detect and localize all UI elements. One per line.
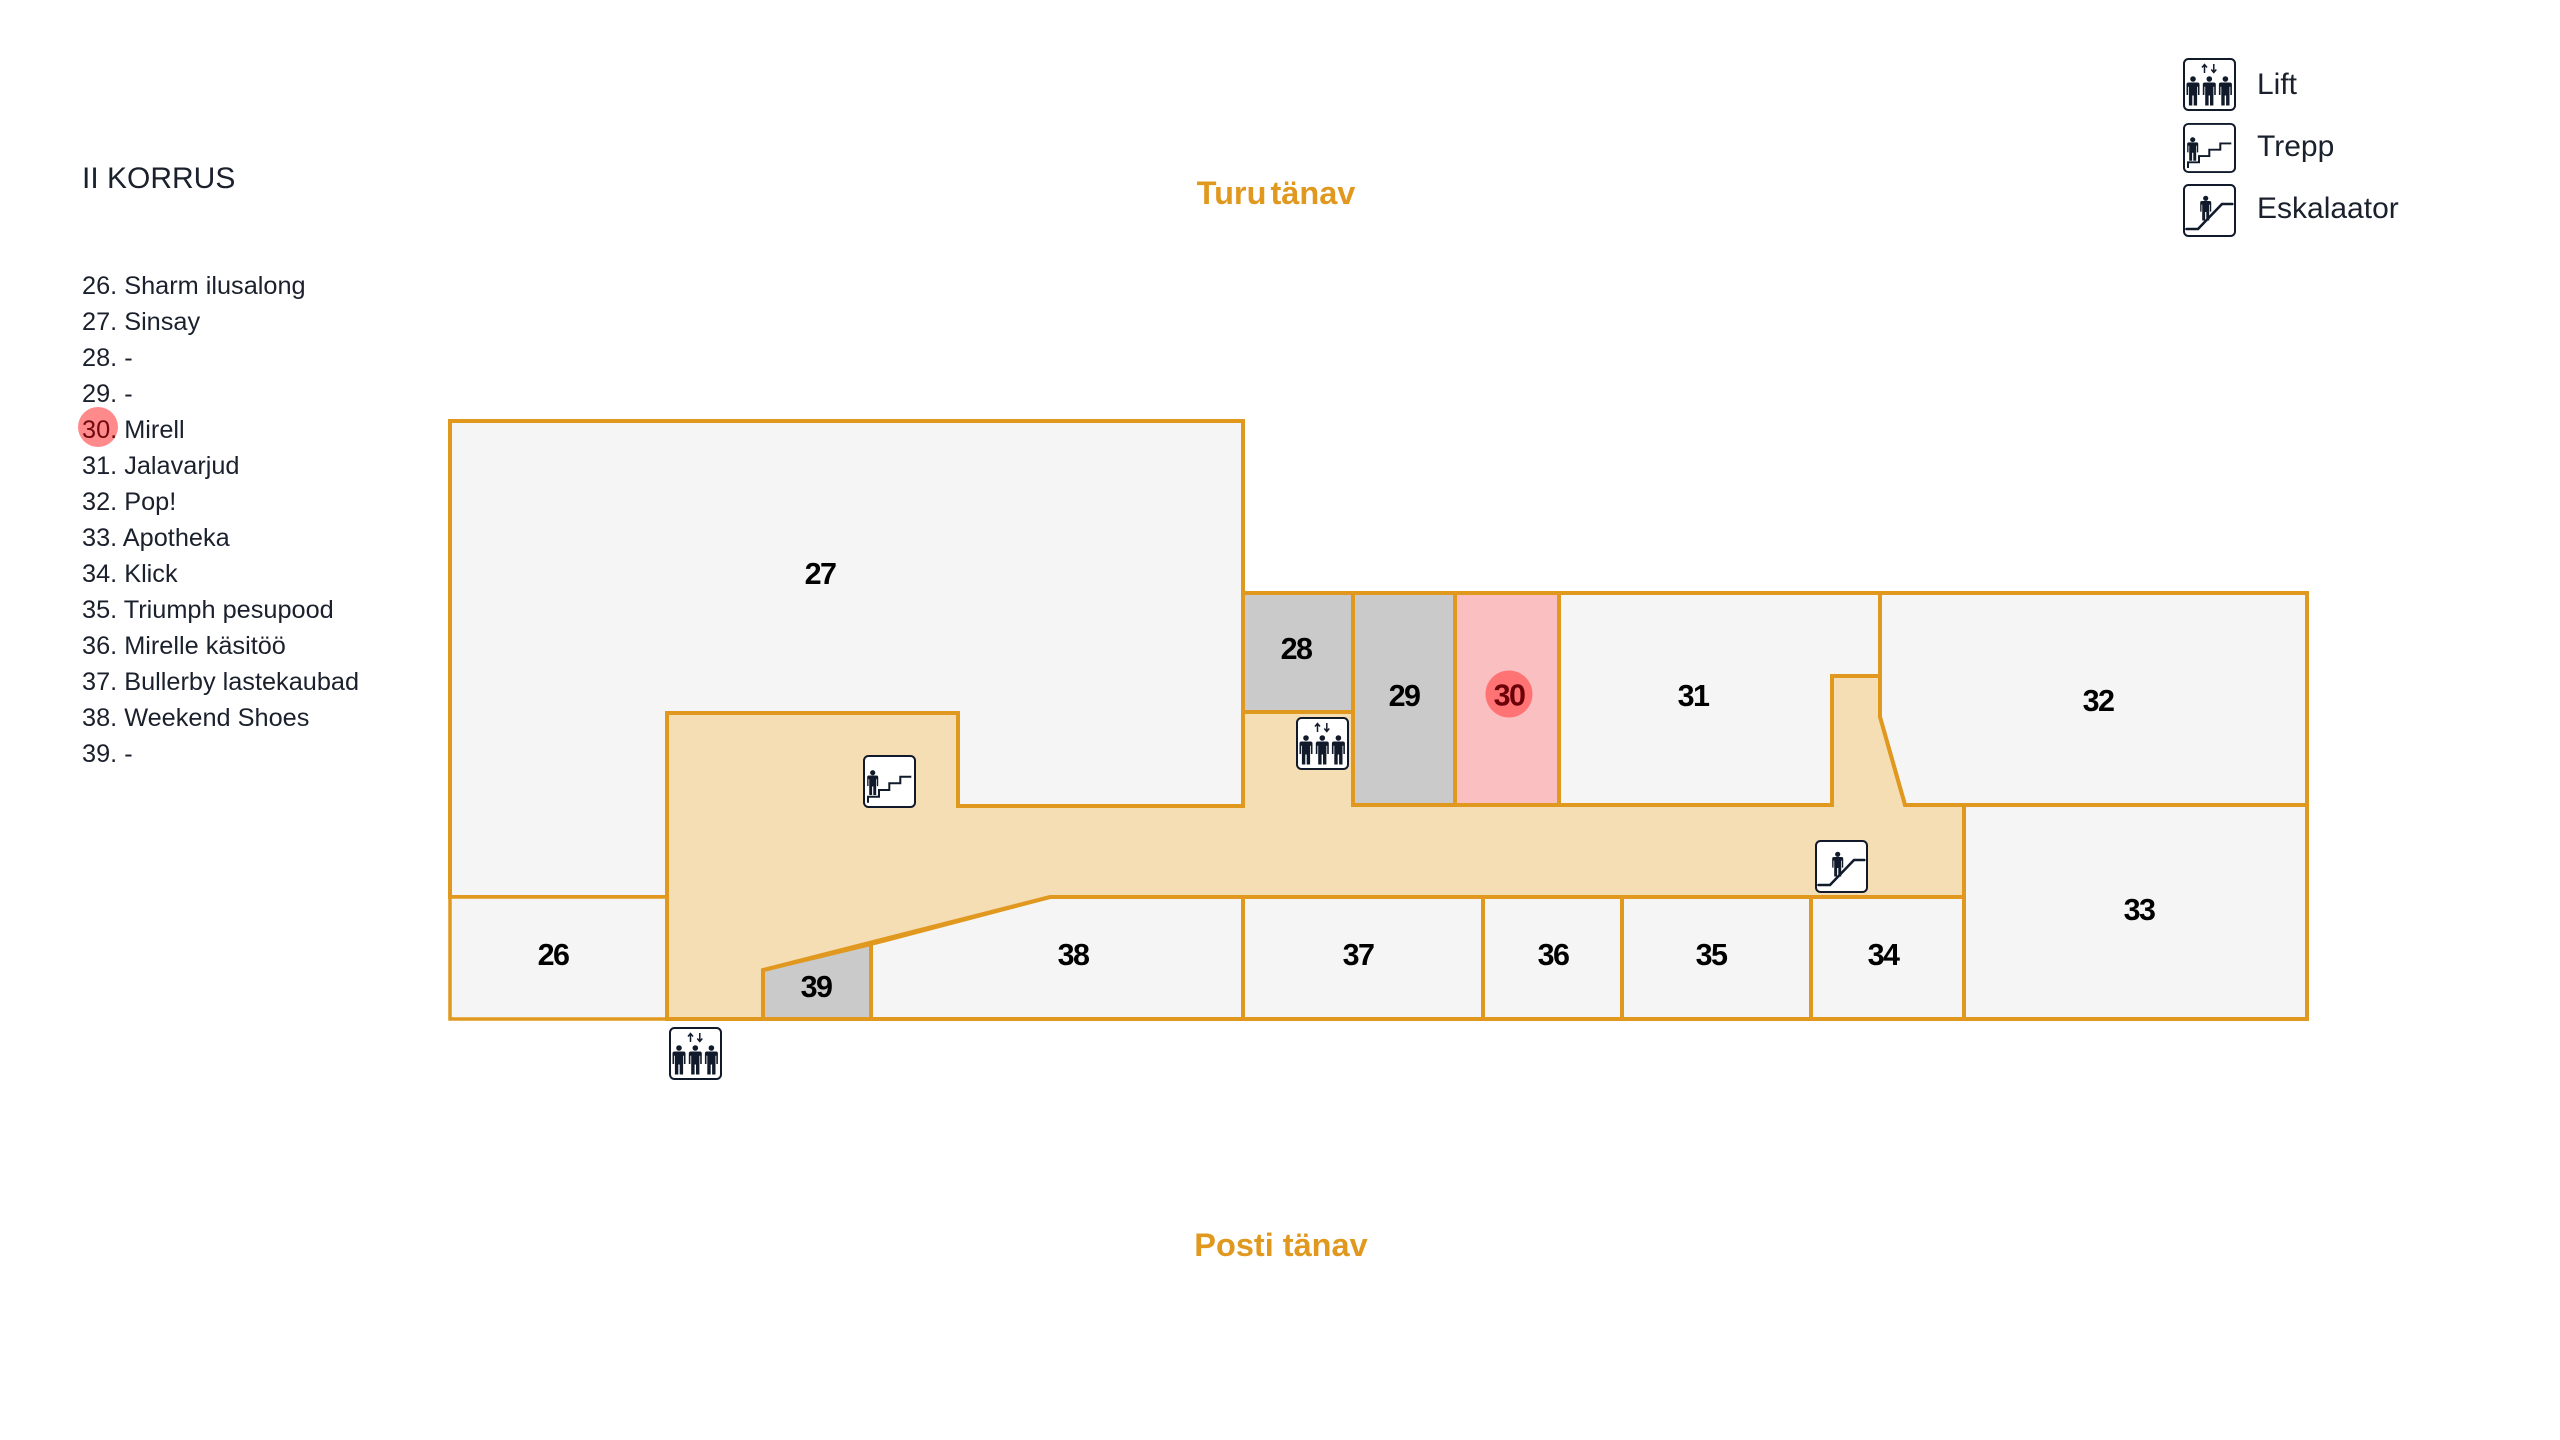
street label: Posti tänav: Posti tänav	[1194, 1227, 1368, 1263]
marker circle for shop 30	[1486, 670, 1532, 718]
shop list: 36. Mirelle käsitöö	[82, 632, 286, 660]
title: floor heading: II KORRUS	[82, 162, 235, 195]
shop list: 28. -	[82, 344, 133, 372]
icon: lift, bottom	[670, 1028, 721, 1079]
unit numbers	[538, 557, 2155, 1004]
unit numbers: 27	[805, 557, 836, 591]
unit numbers: 36	[1538, 938, 1569, 972]
shop list: 33. Apotheka	[82, 524, 231, 552]
unit 33	[1964, 805, 2307, 1019]
shop list: 26. Sharm ilusalong	[82, 272, 306, 300]
legend icon: stairs	[2184, 124, 2235, 172]
unit numbers: 31	[1678, 679, 1710, 713]
legend	[2184, 59, 2399, 236]
shop list: 37. Bullerby lastekaubad	[82, 668, 359, 696]
highlight marker for shop 30	[78, 407, 118, 447]
unit numbers: 26	[538, 938, 569, 972]
shop list: 35. Triumph pesupood	[82, 596, 334, 624]
shop list	[78, 272, 359, 768]
legend icon: lift	[2184, 59, 2235, 110]
unit 35	[1622, 897, 1811, 1019]
unit numbers: 37	[1343, 938, 1374, 972]
unit numbers: 35	[1696, 938, 1728, 972]
unit 37	[1243, 897, 1483, 1019]
unit numbers: 38	[1058, 938, 1090, 972]
icon: lift, centre	[1297, 718, 1348, 769]
icon: stairs on map	[864, 756, 915, 807]
shop list: 29. -	[82, 380, 133, 408]
shop list: 31. Jalavarjud	[82, 452, 240, 480]
unit 27	[450, 421, 1243, 897]
corridor	[667, 676, 1964, 1019]
unit numbers: 30	[1494, 678, 1525, 712]
shop list: 39. -	[82, 740, 133, 768]
shop list: 27. Sinsay	[82, 308, 200, 336]
legend label: escalator: Eskalaator	[2257, 192, 2399, 225]
unit 34	[1811, 897, 1964, 1019]
legend icon: escalator	[2184, 185, 2235, 236]
unit 26	[450, 897, 667, 1019]
unit 31	[1559, 593, 1880, 805]
unit 32	[1880, 593, 2307, 805]
unit 38	[871, 897, 1243, 1019]
shop list: 34. Klick	[82, 560, 178, 588]
unit 36	[1483, 897, 1622, 1019]
unit numbers: 39	[801, 970, 832, 1004]
unit 29	[1353, 593, 1455, 805]
shop list: 32. Pop!	[82, 488, 176, 516]
unit numbers: 28	[1281, 632, 1313, 666]
unit 39	[763, 944, 871, 1019]
unit 28	[1243, 593, 1353, 712]
legend label: stairs: Trepp	[2257, 130, 2334, 163]
unit numbers: 34	[1868, 938, 1900, 972]
icon: escalator on map	[1816, 841, 1867, 892]
unit numbers: 29	[1389, 679, 1420, 713]
street label: Turu tänav: Turu tänav	[1197, 175, 1355, 211]
shop list: 30. Mirell	[82, 416, 185, 444]
floor plan	[450, 421, 2307, 1079]
unit numbers: 33	[2124, 893, 2155, 927]
unit numbers: 32	[2083, 684, 2114, 718]
unit 30	[1455, 593, 1559, 805]
shop list: 38. Weekend Shoes	[82, 704, 309, 732]
legend label: lift: Lift	[2257, 68, 2298, 101]
